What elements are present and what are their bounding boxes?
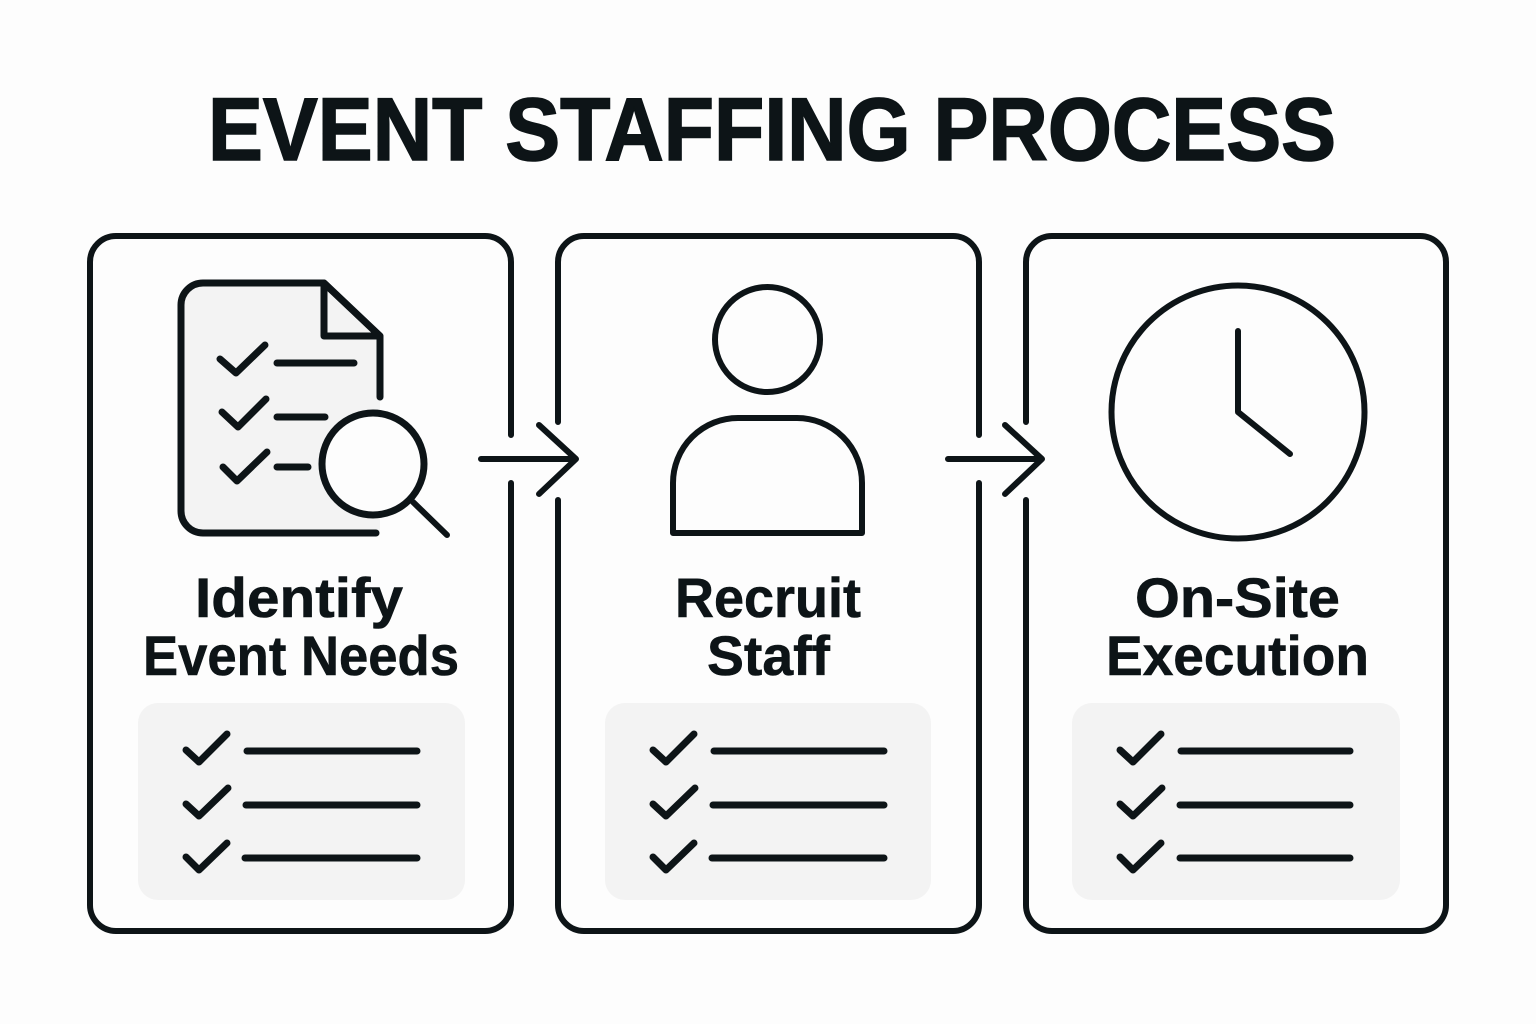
- person body: [673, 418, 862, 533]
- magnifier lens: [322, 413, 424, 515]
- icon: checklist document with magnifier: [181, 283, 447, 535]
- person head: [715, 287, 820, 392]
- document fold: [324, 283, 380, 336]
- clock hands: [1238, 331, 1290, 454]
- icon: clock: [1112, 286, 1364, 538]
- clock face: [1112, 286, 1364, 538]
- document outline: [181, 283, 380, 533]
- magnifier handle: [413, 502, 447, 535]
- checklist card: [138, 703, 465, 900]
- heading: on-site execution: Execution: [1106, 624, 1369, 687]
- document checks and lines: [220, 345, 354, 481]
- icon: person: [673, 287, 862, 533]
- checklist card: [1072, 703, 1400, 900]
- heading: recruit staff: Recruit: [675, 566, 861, 629]
- arrow: recruit to execution: [948, 425, 1042, 494]
- heading: recruit staff: Staff: [707, 624, 830, 687]
- panel: recruit staff: [558, 236, 979, 931]
- document fill: [181, 283, 380, 533]
- panel outline: [558, 236, 979, 931]
- heading: identify event needs: Identify: [195, 566, 403, 629]
- title: EVENT STAFFING PROCESS: [208, 79, 1336, 179]
- heading: identify event needs: [143, 566, 459, 687]
- heading: recruit staff: [675, 566, 861, 687]
- heading: on-site execution: [1106, 566, 1369, 687]
- arrow: identify to recruit: [481, 425, 576, 494]
- panel outline: [90, 236, 511, 931]
- panel: on-site execution: [1026, 236, 1446, 931]
- panel: identify event needs: [90, 236, 511, 931]
- heading: on-site execution: On-Site: [1135, 566, 1340, 629]
- panel outline: [1026, 236, 1446, 931]
- heading: identify event needs: Event Needs: [143, 624, 459, 687]
- checklist card: [605, 703, 931, 900]
